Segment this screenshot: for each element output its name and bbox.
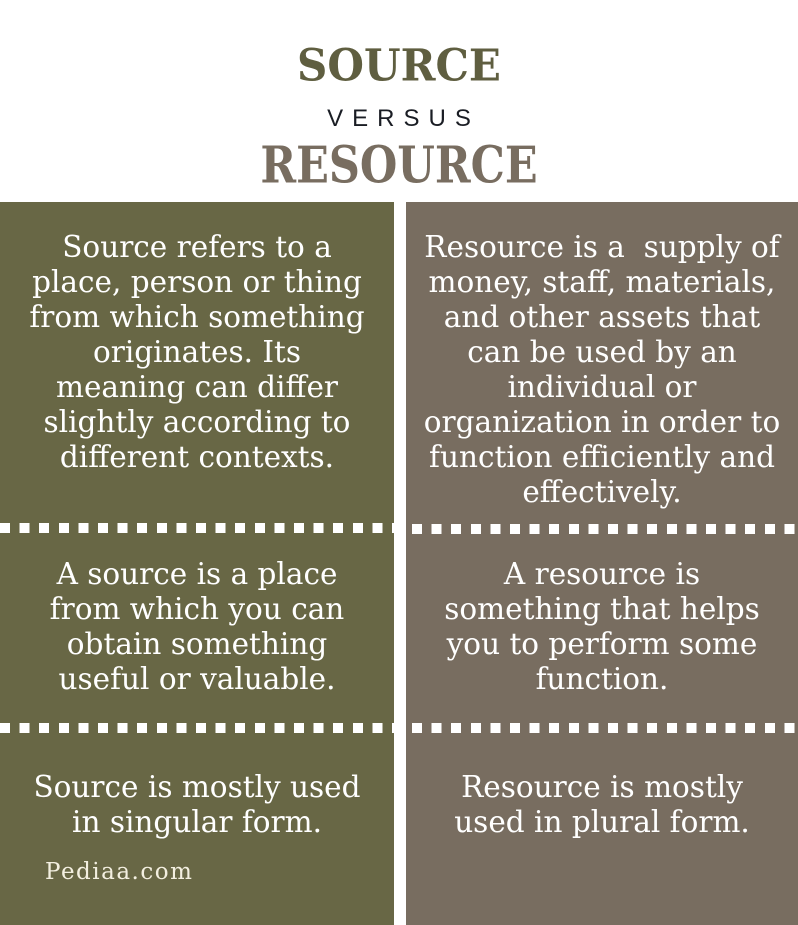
text: source usage: Source is mostly used [33,770,361,804]
text: source meaning [50,557,344,696]
text: source definition: slightly according to [44,405,350,439]
divider dots [0,523,394,533]
text: resource usage [454,770,750,839]
text: source meaning: obtain something [67,627,327,661]
divider dots [412,723,798,733]
divider dots [412,524,798,534]
text: source definition: originates. Its [93,335,301,369]
text: resource definition: can be used by an [467,335,737,369]
text: resource definition: organization in order to [424,405,780,439]
text: source meaning: from which you can [50,592,344,626]
text: source definition: different contexts. [60,440,334,474]
panel: source [0,202,394,925]
text: resource meaning [444,557,760,696]
text: resource usage: Resource is mostly [461,770,743,804]
title: resource: RESOURCE [260,136,538,196]
text: resource meaning: A resource is [504,557,700,591]
title: versus: VERSUS [327,105,480,132]
divider dots [0,723,394,733]
text: resource meaning: function. [536,662,668,696]
text: resource definition: money, staff, materials, [429,265,775,299]
text: resource meaning: something that helps [444,592,760,626]
text: resource definition: individual or [508,370,696,404]
text: resource definition: function efficiently and [429,440,775,474]
text: resource meaning: you to perform some [447,627,757,661]
text: source usage: in singular form. [72,805,322,839]
text: source meaning: A source is a place [57,557,337,591]
title: source: SOURCE [297,40,501,91]
text: resource definition: Resource is a supply of [424,230,780,264]
text: source usage [33,770,361,839]
text: resource definition: effectively. [522,475,682,509]
text: source definition: Source refers to a [62,230,332,264]
text: resource definition: and other assets that [444,300,760,334]
logo: pediaa: Pediaa.com [45,859,193,885]
text: source definition: meaning can differ [56,370,338,404]
text: resource usage: used in plural form. [454,805,750,839]
text: source definition: from which something [29,300,365,334]
text: source definition [29,230,365,474]
text: source meaning: useful or valuable. [58,662,336,696]
panel: resource [406,202,798,925]
text: source definition: place, person or thing [32,265,362,299]
text: resource definition [424,230,782,509]
